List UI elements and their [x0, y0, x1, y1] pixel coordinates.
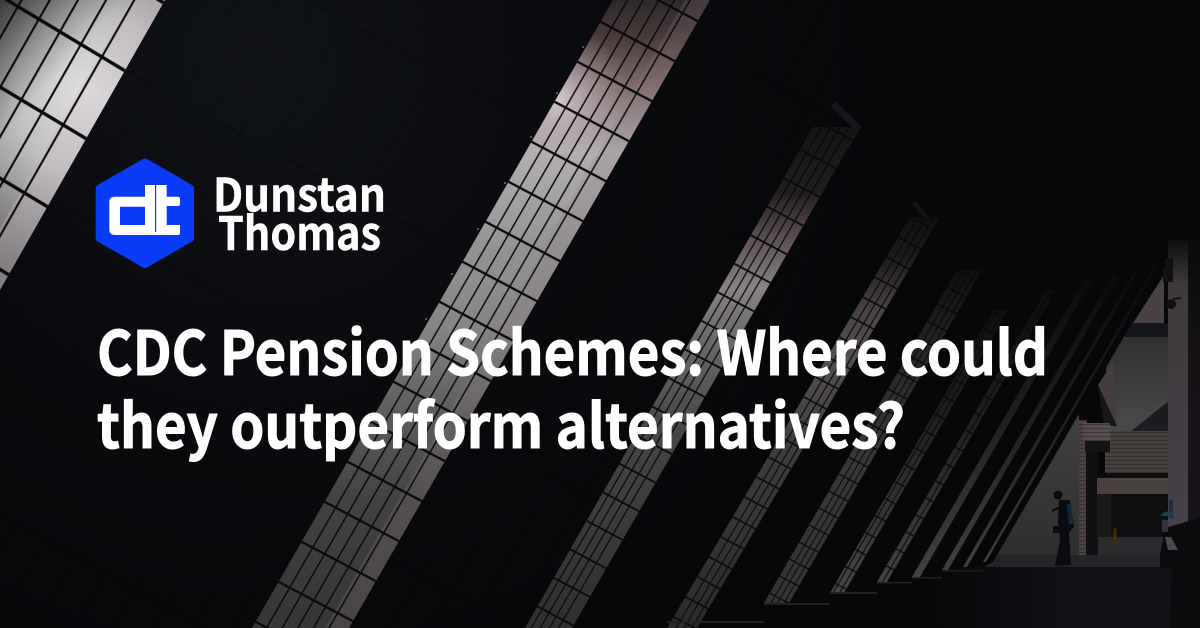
roof box	[1083, 423, 1110, 441]
floor edge highlights at strip bases	[667, 570, 983, 623]
dark band under upper siding	[1125, 323, 1169, 337]
blue sign and umbrella	[1160, 500, 1173, 518]
building window strip: centre large	[252, 0, 710, 628]
gable roof	[1098, 362, 1117, 426]
building window strip: fifth	[764, 270, 982, 603]
title	[97, 304, 1048, 466]
middle siding block	[1105, 431, 1168, 473]
title: CDC Pension Schemes: Where could	[97, 304, 1048, 393]
logo wordmark	[213, 160, 386, 264]
logo wordmark: Dunstan	[213, 160, 386, 226]
building window strip: top left	[0, 0, 165, 290]
icon: blue hexagon with dt monogram	[100, 162, 190, 264]
person looking at phone	[1052, 490, 1074, 566]
security camera	[1166, 298, 1181, 309]
parked bicycles	[1160, 518, 1200, 628]
pale column	[1168, 240, 1188, 550]
floor	[930, 567, 1200, 628]
background scene: buildings beyond the colonnade	[985, 240, 1200, 567]
pale beam	[1097, 478, 1168, 494]
dark band	[1105, 473, 1168, 474]
receding thin window strips	[830, 265, 1158, 593]
left siding column	[1079, 420, 1087, 555]
right wall	[1188, 286, 1200, 522]
dark column	[1086, 445, 1098, 556]
logo wordmark: Thomas	[218, 198, 381, 264]
entrance	[1111, 494, 1168, 537]
Dunstan Thomas logo	[100, 160, 386, 264]
building window strip: third	[525, 104, 860, 628]
ground	[1098, 537, 1164, 555]
sky	[1106, 336, 1169, 432]
bright wall	[997, 414, 1079, 555]
title: they outperform alternatives?	[97, 377, 905, 466]
upper siding	[1133, 275, 1164, 323]
stepped roof triangle	[1130, 399, 1170, 431]
dark bracket	[1163, 258, 1173, 282]
traffic cone	[1112, 528, 1118, 545]
building window strip: fourth	[667, 203, 940, 628]
